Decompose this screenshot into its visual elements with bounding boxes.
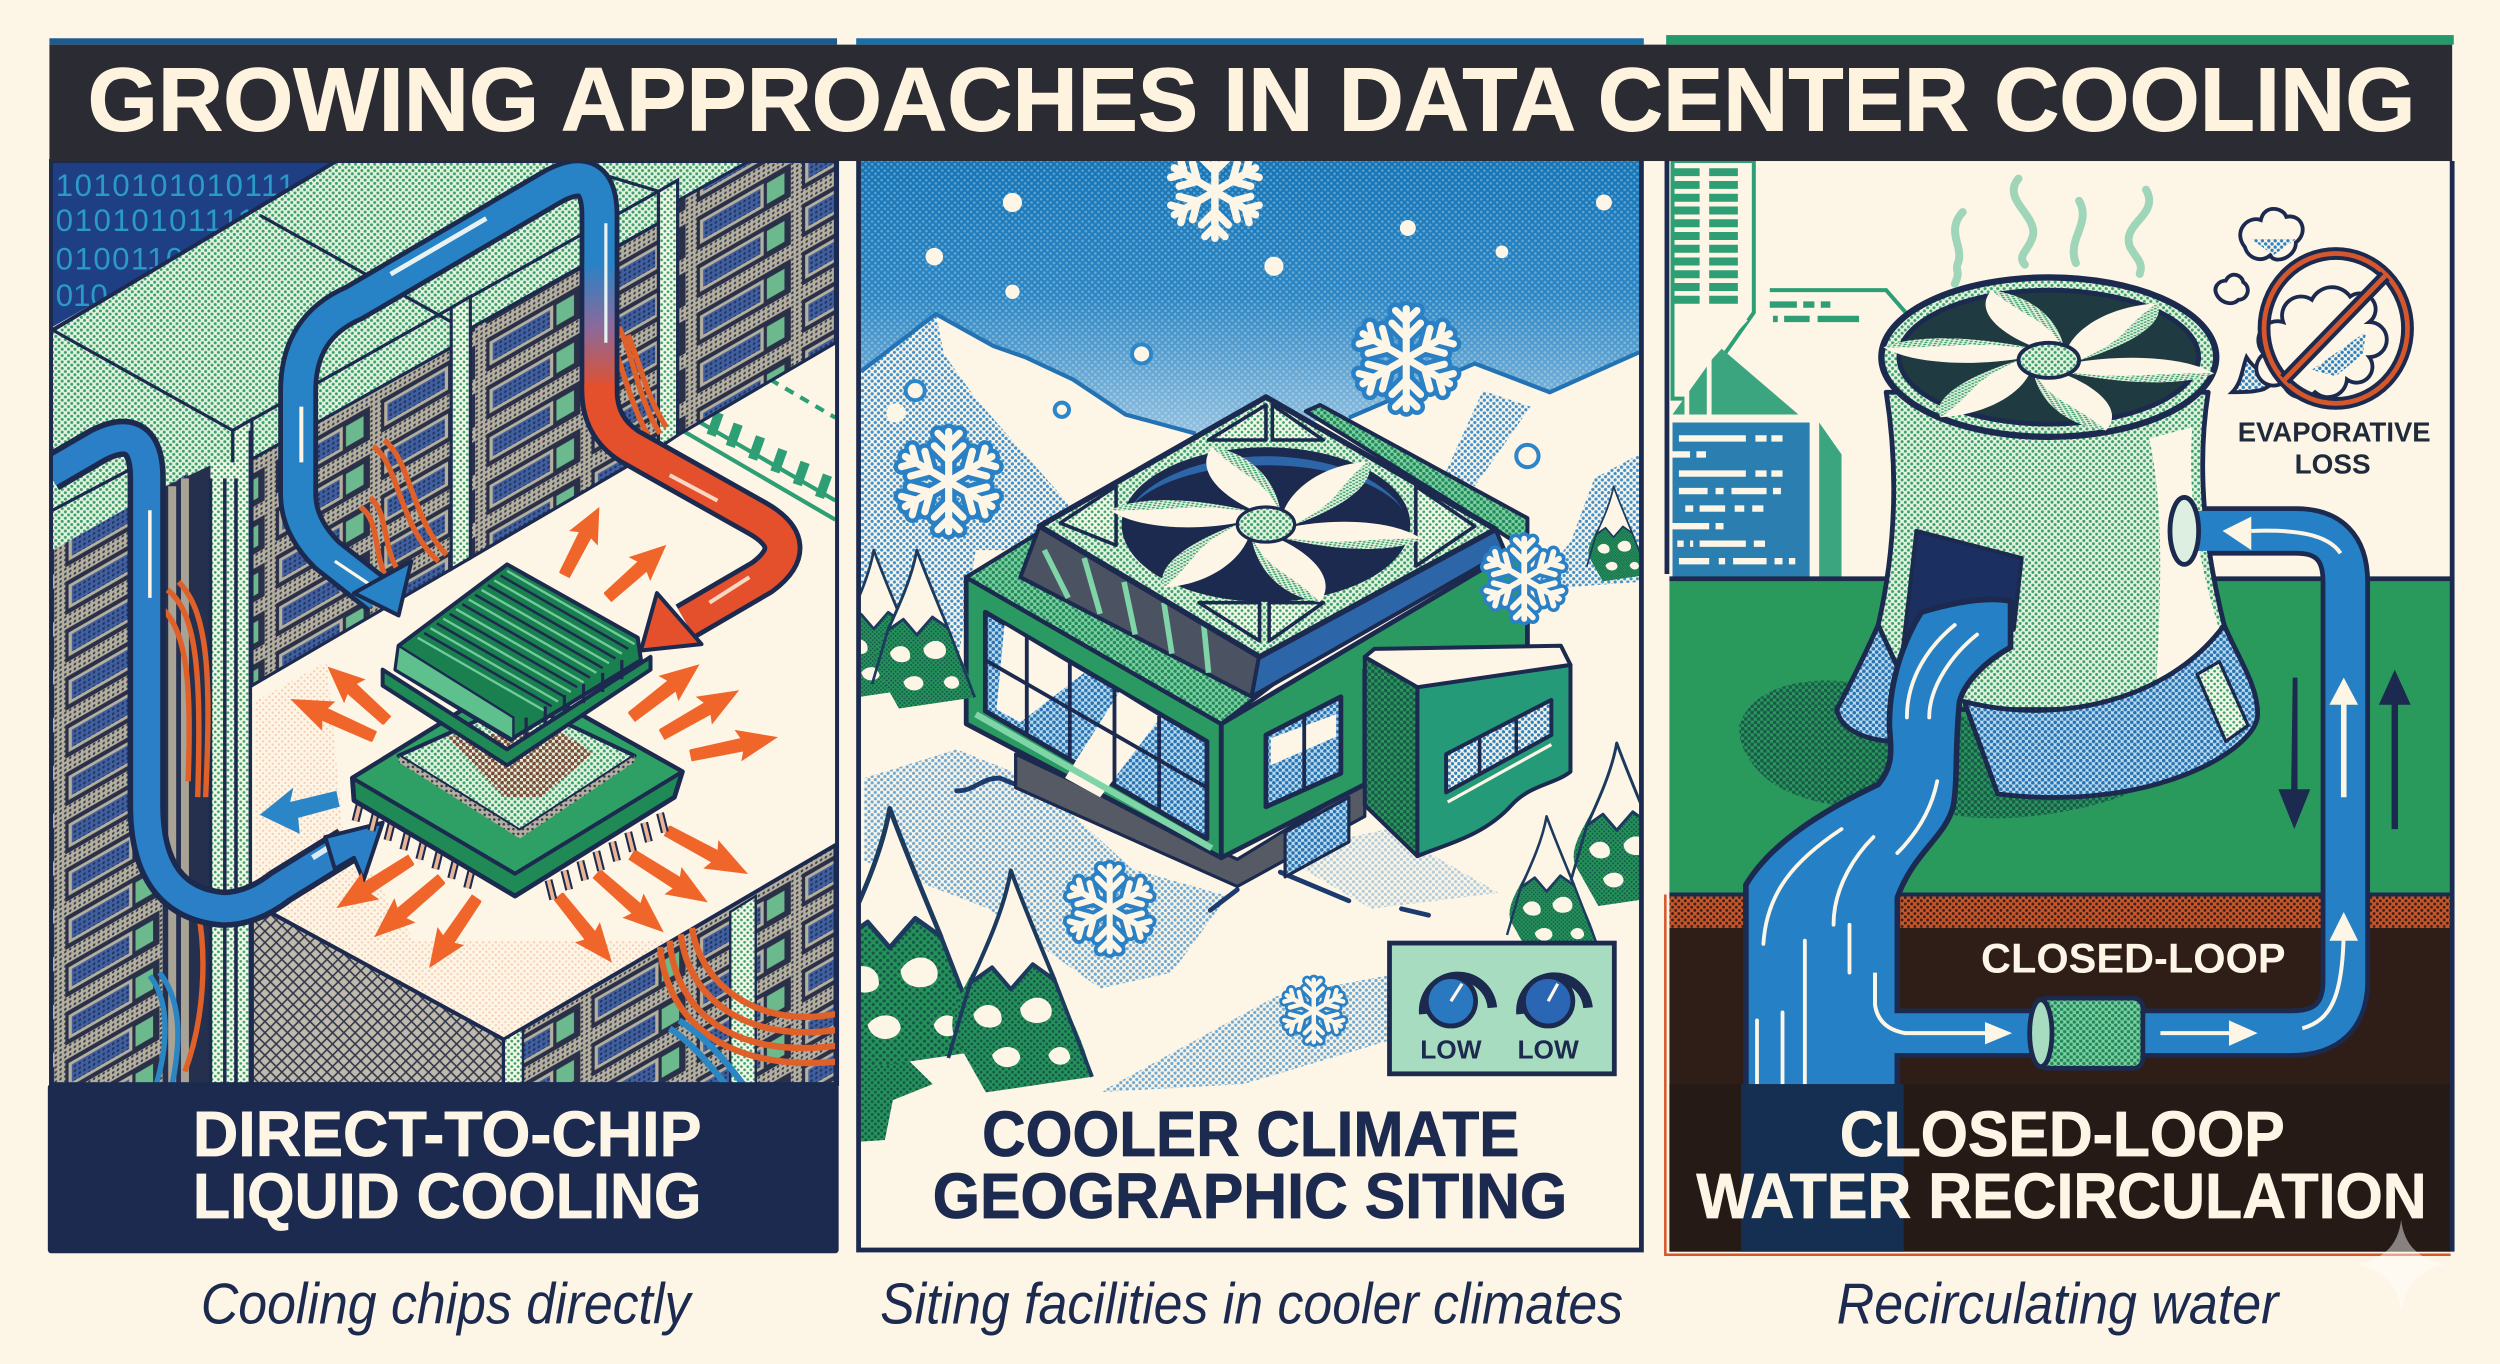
fan blades	[1109, 446, 1423, 603]
data center backdrop	[1673, 161, 1908, 579]
orange soil strip	[1669, 894, 2451, 930]
opening	[1901, 531, 2022, 670]
low settings control panel: LOW	[1420, 1035, 1482, 1065]
binary code backdrop	[53, 161, 343, 327]
panel: cooler climate geographic siting	[816, 144, 1676, 1336]
low settings control panel	[1390, 943, 1614, 1074]
server rack: right side columns	[233, 161, 835, 697]
winter landscape illustration	[860, 161, 1640, 1142]
left wall	[966, 577, 1221, 858]
cables in racks	[360, 327, 666, 577]
annex	[1365, 657, 1417, 856]
scene illustration	[1669, 161, 2451, 1253]
heat glow on floor	[255, 662, 670, 1040]
snowflakes	[898, 144, 1565, 1042]
caption band	[1669, 1084, 2451, 1253]
evaporative loss: LOSS	[2295, 449, 2371, 480]
prohibition sign	[2264, 254, 2408, 403]
heading: CLOSED-LOOP	[1840, 1098, 2285, 1170]
flow direction arrows	[2278, 670, 2411, 829]
icon: watermark sparkle	[2357, 1220, 2446, 1312]
skirt	[1837, 625, 1913, 741]
heading	[933, 1098, 1567, 1232]
title bar	[49, 45, 2452, 161]
caption bar	[48, 1084, 839, 1253]
arrow: blue outflow	[260, 788, 340, 834]
falling snow dots	[886, 193, 1612, 467]
foundation	[1016, 754, 1365, 886]
server rack: left side	[53, 430, 252, 1084]
heading	[193, 1098, 702, 1232]
arrow: coolant into chip	[325, 823, 383, 880]
snowy mountains	[861, 312, 1639, 654]
clouds	[2215, 209, 2387, 398]
heading: COOLER CLIMATE	[982, 1098, 1519, 1170]
top colour strips	[49, 35, 2454, 45]
binary code backdrop: 01010101111	[56, 203, 255, 238]
rack top surface	[53, 163, 742, 456]
return pipe fill and arrows	[1875, 497, 2358, 1046]
subtitle: Cooling chips directly	[201, 1272, 693, 1336]
dark soil	[1669, 928, 2451, 1253]
pipe: loop from cool blue to hot red	[298, 178, 783, 622]
subtitle: Siting facilities in cooler climates	[880, 1272, 1623, 1336]
evaporative loss	[2215, 209, 2431, 480]
binary code backdrop: 010	[56, 278, 108, 313]
rack left face base	[53, 332, 127, 550]
evaporative loss: EVAPORATIVE	[2238, 417, 2431, 448]
sky	[861, 161, 1639, 448]
fan unit on roof	[1020, 397, 1505, 697]
server rack: bottom right	[504, 845, 835, 1084]
glazing	[985, 612, 1207, 839]
steam wisps	[1955, 179, 2149, 284]
heat arrows	[284, 500, 781, 977]
panel: direct-to-chip liquid cooling	[48, 161, 839, 1336]
subtitle: Recirculating water	[1837, 1272, 2281, 1336]
cooling tower	[1837, 277, 2258, 798]
green ground	[1669, 579, 2451, 894]
building	[966, 405, 1570, 886]
arrow: cold inlet head	[354, 561, 411, 615]
heat sink	[383, 564, 651, 765]
title: GROWING APPROACHES IN DATA CENTER COOLING	[88, 50, 2415, 151]
shaded snow around building	[864, 749, 1228, 989]
roof band	[966, 534, 1276, 724]
heading: WATER RECIRCULATION	[1696, 1160, 2427, 1232]
low settings control panel: LOW	[1517, 1035, 1579, 1065]
top ring and fan	[1881, 277, 2216, 437]
right return pipe outline	[1897, 531, 2345, 1033]
binary code backdrop: 0100110	[56, 241, 183, 276]
pipe coupler	[2030, 998, 2143, 1068]
pipe: left blue coolant pipe	[49, 438, 348, 909]
panel edges	[1667, 161, 2452, 1252]
heading	[1696, 1098, 2427, 1232]
illustration: server racks and chip	[49, 161, 837, 1084]
binary code backdrop: 1010101010111	[56, 168, 295, 203]
water stream	[1746, 599, 2011, 1091]
panel background and frame	[859, 153, 1641, 1250]
floor and circuit trace	[684, 380, 836, 522]
heading: LIQUID COOLING	[193, 1160, 702, 1232]
heading: GEOGRAPHIC SITING	[933, 1160, 1567, 1232]
pine trees	[816, 486, 1676, 1142]
closed-loop label: CLOSED-LOOP	[1981, 935, 2286, 982]
dark mesh below floor	[252, 902, 504, 1084]
panel outline	[51, 161, 837, 1084]
tower ground shadow	[1739, 680, 2152, 818]
arrow: hot inlet head	[641, 593, 702, 651]
panel: closed-loop water recirculation	[1665, 161, 2452, 1336]
processor chip	[350, 706, 685, 900]
heading: DIRECT-TO-CHIP	[193, 1098, 702, 1170]
right wall	[1221, 542, 1527, 858]
snow drift lines	[957, 778, 1429, 915]
